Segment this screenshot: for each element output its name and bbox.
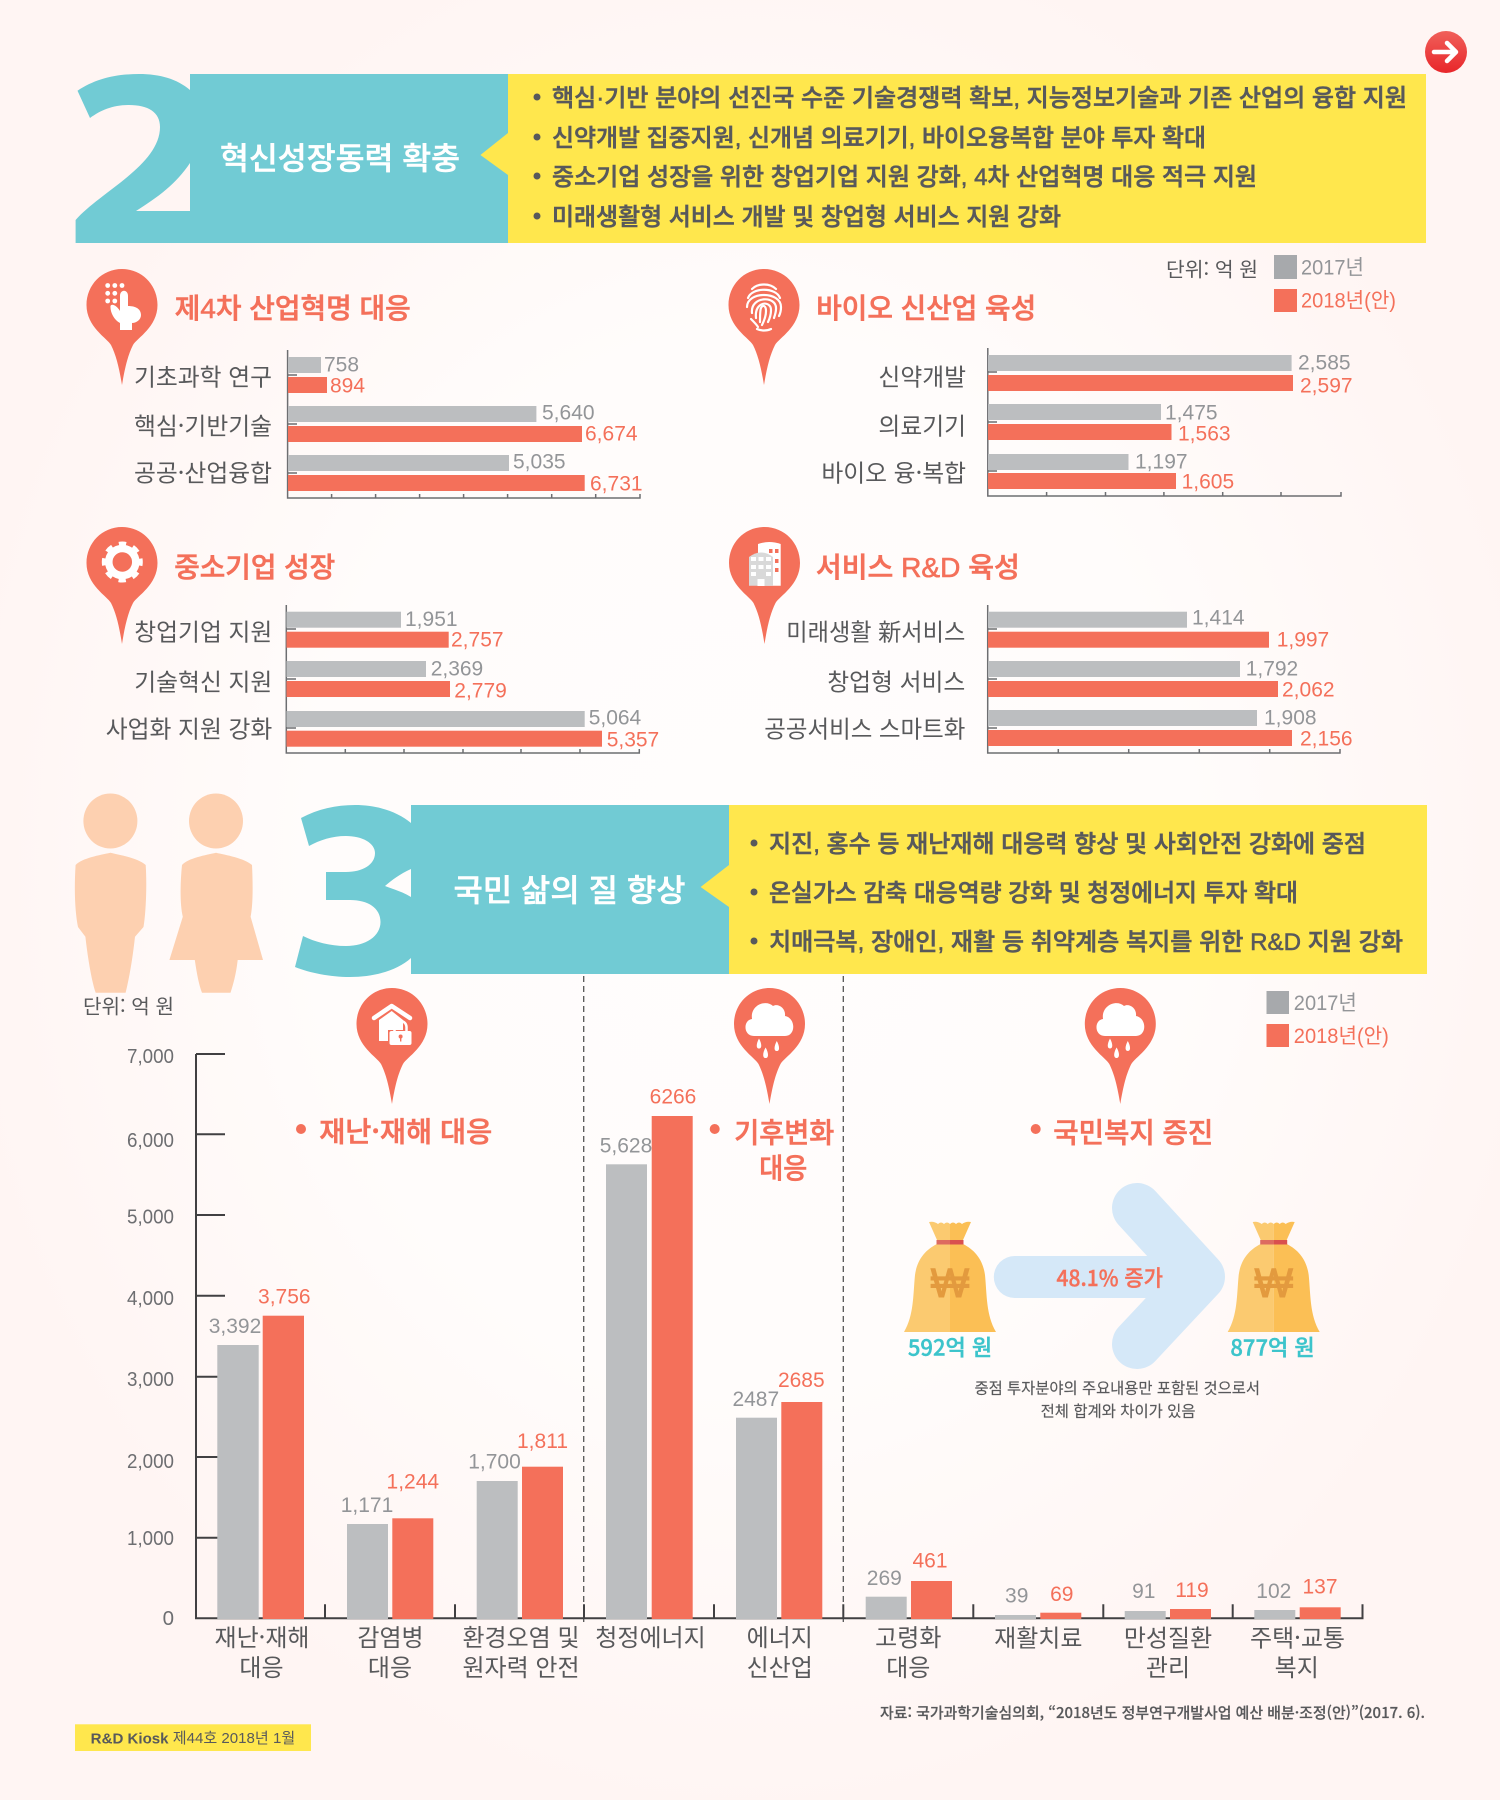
- group: 감염병 대응: 1,244: [387, 1470, 439, 1494]
- group: 환경오염 및 원자력 안전: 환경오염 및: [462, 1618, 580, 1653]
- title: 국민 삶의 질 향상: [454, 866, 686, 910]
- group: 환경오염 및 원자력 안전: 원자력 안전: [462, 1648, 580, 1683]
- row: 공공서비스 스마트화: 2,156: [1300, 728, 1353, 750]
- row: 기술혁신 지원: 기술혁신 지원: [134, 662, 272, 698]
- row: 창업형 서비스: 1,792: [1246, 658, 1298, 680]
- row: 공공·산업융합: 공공·산업융합: [134, 454, 272, 488]
- row: 의료기기: 1,475: [1165, 402, 1218, 424]
- row: 공공서비스 스마트화: 공공서비스 스마트화: [764, 710, 965, 744]
- row: 사업화 지원 강화: 5,357: [607, 728, 659, 752]
- axes: [988, 348, 1341, 496]
- icon: pin with rain cloud: [734, 988, 805, 1104]
- illustration: man and woman: [75, 794, 263, 993]
- group: 고령화 대응: 대응: [886, 1648, 930, 1683]
- row: 신약개발: 2,585: [1298, 352, 1351, 374]
- y axis: 6,000: [127, 1129, 174, 1152]
- group: 재활치료: 69: [1050, 1583, 1073, 1606]
- legend: top charts: [1166, 254, 1396, 312]
- row: 핵심·기반기술: 6,674: [585, 422, 638, 446]
- group: 고령화 대응: 고령화: [875, 1618, 941, 1653]
- summary bullets: 중소기업 성장을 위한 창업기업 지원 강화, 4차 산업혁명 대응 적극 지원: [552, 164, 1257, 191]
- row: 공공·산업융합: 6,731: [590, 472, 643, 496]
- teal title block: [190, 74, 508, 243]
- arrow: 48.1% increase: [994, 1208, 1200, 1344]
- y axis: 1,000: [127, 1527, 174, 1550]
- row: 바이오 융·복합: [821, 450, 1234, 494]
- axes: [988, 605, 1340, 753]
- icon: money bag 592: [904, 1222, 996, 1363]
- icon: pin with buildings: [729, 527, 800, 644]
- row: 공공서비스 스마트화: [764, 706, 1353, 750]
- row: 기초과학 연구: 894: [330, 374, 365, 398]
- group: 재활치료: 39: [1005, 1584, 1028, 1608]
- row: 창업형 서비스: [827, 658, 1335, 702]
- row: 창업기업 지원: [134, 608, 504, 652]
- group: 에너지 신산업: [732, 1369, 825, 1683]
- axes: [286, 605, 639, 753]
- group: 재난·재해 대응: 3,392: [209, 1315, 261, 1338]
- row: 핵심·기반기술: [134, 402, 638, 446]
- summary bullets: 치매극복, 장애인, 재활 등 취약계층 복지를 위한 R&D 지원 강화: [769, 929, 1403, 956]
- row: 핵심·기반기술: 5,640: [542, 402, 595, 424]
- footer tag: R&D Kiosk 제44호 2018년 1월: [91, 1730, 295, 1747]
- legend: top charts: 2017년: [1301, 256, 1364, 280]
- heading: climate change response: [710, 1112, 834, 1187]
- icon: pin with fingerprint: [728, 269, 800, 385]
- panel: 4th industrial revolution: [86, 269, 643, 498]
- group: 만성질환 관리: 119: [1175, 1579, 1209, 1602]
- icon: money bag 877: ₩: [1254, 1260, 1293, 1306]
- group: 고령화 대응: 461: [912, 1550, 948, 1572]
- row: 공공·산업융합: 5,035: [513, 450, 566, 474]
- panel: bio new industry: [728, 269, 1353, 496]
- icon: pin with rain cloud: [1085, 988, 1156, 1104]
- group: 환경오염 및 원자력 안전: [462, 1430, 580, 1683]
- row: 창업기업 지원: 창업기업 지원: [134, 612, 272, 648]
- teal title block: [411, 805, 729, 974]
- note: 중점 투자분야의 주요내용만 포함된 것으로서: [974, 1377, 1260, 1399]
- legend: bottom chart: [1266, 991, 1389, 1048]
- unit label: 단위: 억 원: [83, 990, 174, 1020]
- row: 기술혁신 지원: [134, 658, 507, 702]
- row: 미래생활 新서비스: 1,414: [1192, 606, 1245, 630]
- row: 창업기업 지원: 2,757: [451, 628, 504, 652]
- arrow: 48.1% increase: 48.1% 증가: [1056, 1261, 1163, 1293]
- group: 주택·교통 복지: [1250, 1576, 1345, 1683]
- summary bullets: 온실가스 감축 대응역량 강화 및 청정에너지 투자 확대: [769, 880, 1298, 907]
- summary bullets: 신약개발 집중지원, 신개념 의료기기, 바이오융복합 분야 투자 확대: [552, 125, 1206, 152]
- group: 에너지 신산업: 2685: [778, 1369, 825, 1392]
- group: 환경오염 및 원자력 안전: 1,811: [517, 1430, 568, 1453]
- row: 창업기업 지원: 1,951: [405, 608, 458, 631]
- panel: service R&D: [729, 527, 1353, 753]
- group: 환경오염 및 원자력 안전: 1,700: [468, 1450, 521, 1474]
- row: 미래생활 新서비스: 1,997: [1277, 628, 1329, 652]
- x axis: [195, 1604, 1362, 1618]
- icon: money bag 592: ₩: [931, 1260, 970, 1306]
- y axis: 3,000: [127, 1368, 174, 1391]
- summary bullets: [750, 831, 1403, 956]
- icon: next arrow button: [1425, 31, 1467, 73]
- row: 기초과학 연구: 758: [324, 354, 359, 376]
- row: 기초과학 연구: [134, 354, 365, 398]
- summary bullets: 미래생활형 서비스 개발 및 창업형 서비스 지원 강화: [552, 204, 1061, 231]
- section dividers: [584, 976, 843, 1624]
- group: 재활치료: [994, 1583, 1082, 1654]
- y axis: 0: [163, 1607, 174, 1630]
- note: [974, 1377, 1260, 1422]
- group: 에너지 신산업: 에너지: [747, 1618, 813, 1653]
- footer tag: [75, 1724, 311, 1751]
- heading: 제4차 산업혁명 대응: [175, 293, 411, 324]
- y axis: 4,000: [127, 1287, 174, 1310]
- panel: SME growth: [86, 527, 659, 753]
- icon: money bag 877: [1228, 1222, 1320, 1363]
- title: 혁신성장동력 확충: [220, 134, 460, 178]
- group: 감염병 대응: [341, 1470, 439, 1683]
- icon: pin with gear: [86, 527, 158, 644]
- group: 청정에너지: 청정에너지: [595, 1618, 706, 1653]
- group: 만성질환 관리: 관리: [1146, 1648, 1190, 1683]
- group: 고령화 대응: [866, 1550, 952, 1683]
- group: 재난·재해 대응: 대응: [239, 1648, 284, 1683]
- heading: welfare: 국민복지 증진: [1053, 1112, 1213, 1152]
- row: 창업형 서비스: 2,062: [1282, 678, 1335, 702]
- row: 신약개발: 2,597: [1300, 374, 1353, 398]
- row: 신약개발: 신약개발: [878, 358, 966, 392]
- numeral 2: [76, 74, 190, 243]
- heading: 서비스 R&D 육성: [816, 552, 1020, 583]
- row: 사업화 지원 강화: 5,064: [589, 706, 642, 730]
- group: 주택·교통 복지: 복지: [1275, 1648, 1319, 1683]
- group: 고령화 대응: 269: [867, 1567, 902, 1590]
- row: 사업화 지원 강화: 사업화 지원 강화: [106, 710, 272, 744]
- summary bullets: 지진, 홍수 등 재난재해 대응력 향상 및 사회안전 강화에 중점: [769, 831, 1366, 858]
- note: 전체 합계와 차이가 있음: [1041, 1400, 1196, 1422]
- y axis: 5,000: [127, 1206, 174, 1229]
- y axis: [127, 1045, 225, 1630]
- row: 미래생활 新서비스: 미래생활 新서비스: [786, 612, 965, 648]
- group: 만성질환 관리: 91: [1132, 1580, 1155, 1603]
- group: 만성질환 관리: [1124, 1579, 1212, 1683]
- row: 사업화 지원 강화: [106, 706, 659, 752]
- row: 기초과학 연구: 기초과학 연구: [134, 358, 272, 392]
- heading: disaster response: 재난·재해 대응: [319, 1110, 492, 1150]
- row: 핵심·기반기술: 핵심·기반기술: [134, 406, 272, 442]
- group: 청정에너지: 5,628: [600, 1134, 652, 1158]
- y axis: 2,000: [127, 1450, 174, 1473]
- amount: 592억 원: [908, 1331, 992, 1363]
- row: 신약개발: [878, 352, 1353, 398]
- group: 청정에너지: 6266: [650, 1086, 696, 1108]
- row: 기술혁신 지원: 2,369: [431, 658, 483, 680]
- banner: section 2: [76, 74, 1426, 243]
- row: 의료기기: 1,563: [1178, 422, 1231, 446]
- heading: climate change response: 대응: [759, 1147, 807, 1187]
- numeral 3: [295, 805, 411, 977]
- summary bullets: [534, 85, 1407, 231]
- bar chart: budget by area: [127, 1045, 1362, 1683]
- row: 기술혁신 지원: 2,779: [454, 680, 507, 702]
- legend: bottom chart: 2017년: [1294, 992, 1357, 1015]
- group: 감염병 대응: 1,171: [341, 1494, 393, 1517]
- yellow summary block: [480, 74, 1426, 243]
- legend: top charts: 2018년(안): [1301, 290, 1396, 312]
- heading: 중소기업 성장: [174, 552, 335, 583]
- heading: 바이오 신산업 육성: [816, 293, 1036, 324]
- banner: section 3: [295, 805, 1427, 977]
- heading: climate change response: 기후변화: [734, 1112, 834, 1152]
- group: 만성질환 관리: 만성질환: [1124, 1618, 1212, 1654]
- group: 재난·재해 대응: 3,756: [258, 1286, 311, 1308]
- source: 자료: 국가과학기술심의회, “2018년도 정부연구개발사업 예산 배분·조정(안)”(2017. 6).: [880, 1702, 1425, 1723]
- group: 주택·교통 복지: 주택·교통: [1250, 1618, 1345, 1654]
- group: 재난·재해 대응: 재난·재해: [214, 1618, 310, 1653]
- group: 주택·교통 복지: 137: [1302, 1576, 1338, 1598]
- group: 감염병 대응: 대응: [368, 1648, 412, 1683]
- group: 에너지 신산업: 2487: [732, 1388, 779, 1411]
- group: 에너지 신산업: 신산업: [747, 1648, 813, 1683]
- row: 바이오 융·복합: 바이오 융·복합: [821, 454, 966, 488]
- summary bullets: 핵심·기반 분야의 선진국 수준 기술경쟁력 확보, 지능정보기술과 기존 산업의 융합 지원: [552, 85, 1407, 112]
- row: 의료기기: [878, 402, 1231, 446]
- group: 재난·재해 대응: [209, 1286, 311, 1683]
- group: 재활치료: 재활치료: [994, 1618, 1082, 1654]
- legend: bottom chart: 2018년(안): [1294, 1025, 1389, 1048]
- row: 공공서비스 스마트화: 1,908: [1264, 706, 1317, 730]
- row: 바이오 융·복합: 1,197: [1135, 450, 1188, 474]
- row: 창업형 서비스: 창업형 서비스: [827, 662, 965, 698]
- amount: 877억 원: [1230, 1331, 1315, 1363]
- legend: top charts: 단위: 억 원: [1166, 254, 1258, 282]
- row: 바이오 융·복합: 1,605: [1182, 470, 1234, 494]
- yellow summary block: [701, 805, 1427, 974]
- group: 청정에너지: [595, 1086, 706, 1653]
- group: 감염병 대응: 감염병: [357, 1618, 424, 1653]
- axes: [288, 350, 640, 498]
- row: 공공·산업융합: [134, 450, 643, 496]
- row: 의료기기: 의료기기: [878, 406, 966, 442]
- row: 미래생활 新서비스: [786, 606, 1329, 652]
- group: 주택·교통 복지: 102: [1256, 1580, 1291, 1603]
- icon: pin with house and lock: [356, 988, 428, 1104]
- icon: pin with hand: [86, 269, 158, 385]
- y axis: 7,000: [127, 1045, 174, 1068]
